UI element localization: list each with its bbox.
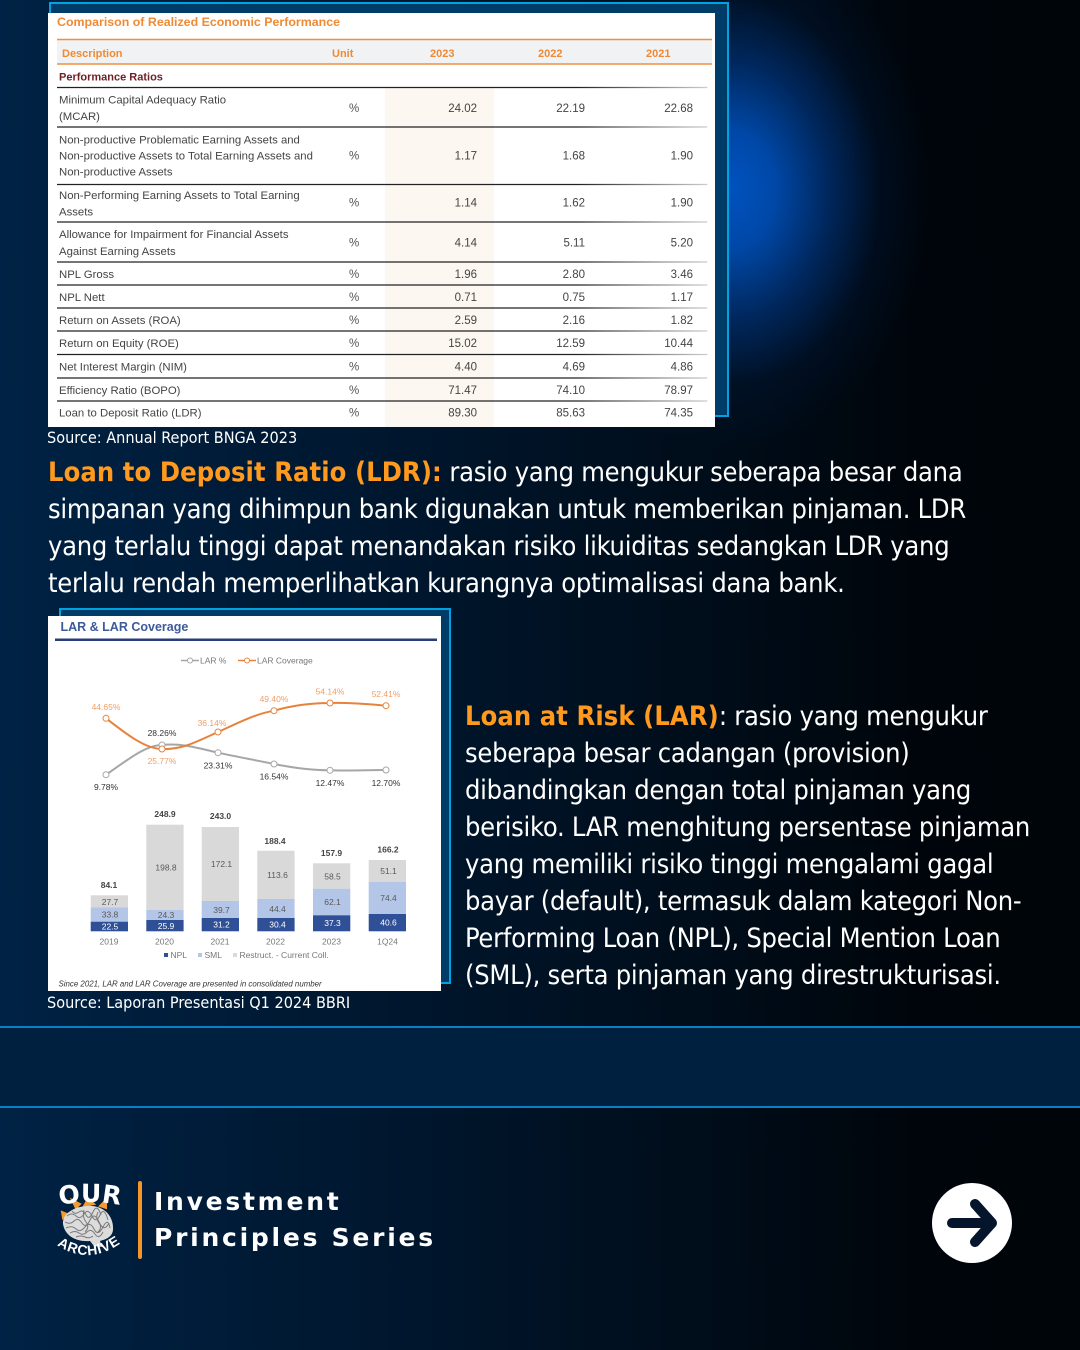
stacked bar chart: 27.7 [102, 897, 119, 907]
line chart [92, 686, 401, 792]
line chart: 44.65% [92, 702, 121, 712]
chart legend: LAR Coverage [257, 656, 313, 666]
stacked bar chart: 40.6 [380, 918, 397, 928]
table: comparison of realized economic performance: 1.17 [455, 150, 477, 162]
vertical divider [138, 1181, 142, 1259]
text block: LDR definition: simpanan yang dihimpun bank digunakan untuk memberikan pinjaman. LDR [48, 494, 966, 525]
table: comparison of realized economic performance: Efficiency Ratio (BOPO) [59, 385, 181, 397]
table: comparison of realized economic performance: Against Earning Assets [59, 246, 176, 258]
stacked bar chart: 188.4 [264, 836, 286, 846]
table: comparison of realized economic performance: NPL Gross [59, 269, 114, 281]
bar legend [164, 950, 329, 960]
text block: LAR definition: Loan at Risk (LAR): rasio yang mengukur [465, 701, 988, 732]
text block: LDR definition: yang terlalu tinggi dapat menandakan risiko likuiditas sedangkan LDR yang [48, 531, 949, 562]
bar legend: NPL [170, 950, 187, 960]
icon: next arrow [932, 1183, 1012, 1263]
chart panel: LAR and LAR coverage: LAR & LAR Coverage [60, 620, 188, 634]
stacked bar chart: 30.4 [269, 920, 286, 930]
table: comparison of realized economic performance: % [349, 150, 359, 162]
stacked bar chart: 58.5 [324, 872, 341, 882]
text block: LAR definition: (SML), serta pinjaman yang direstrukturisasi. [465, 960, 1001, 991]
source: annual report: Source: Annual Report BNGA 2023 [47, 428, 297, 447]
stacked bar chart: 62.1 [324, 897, 341, 907]
line chart: 9.78% [94, 782, 118, 792]
series title: Investment [154, 1187, 341, 1216]
table: comparison of realized economic performance: Return on Equity (ROE) [59, 338, 179, 350]
table: comparison of realized economic performance: 2022 [538, 48, 562, 60]
line chart: 54.14% [316, 686, 345, 696]
line chart: 25.77% [148, 756, 177, 766]
stacked bar chart: 44.4 [269, 904, 286, 914]
table: comparison of realized economic performance: (MCAR) [59, 111, 100, 123]
stacked bar chart: 84.1 [101, 880, 118, 890]
line chart: 16.54% [260, 772, 289, 782]
stacked bar chart: 39.7 [213, 905, 230, 915]
chart panel: LAR and LAR coverage [48, 616, 441, 991]
table: comparison of realized economic performance: NPL Nett [59, 292, 105, 304]
table: comparison of realized economic performance: % [349, 315, 359, 327]
table: comparison of realized economic performance: 4.14 [455, 238, 478, 250]
table: comparison of realized economic performance: 22.19 [556, 103, 585, 115]
text block: LAR definition: dibandingkan dengan total pinjaman yang [465, 775, 971, 806]
table: comparison of realized economic performance: 1.68 [563, 150, 585, 162]
series title: Principles Series [154, 1223, 436, 1252]
line chart: 36.14% [198, 718, 227, 728]
table: comparison of realized economic performance: Net Interest Margin (NIM) [59, 362, 187, 374]
table: comparison of realized economic performance: % [349, 292, 359, 304]
table: comparison of realized economic performance: Non-productive Problematic Earning Assets and [59, 134, 300, 146]
stacked bar chart: 157.9 [321, 848, 342, 858]
text block: LDR definition: terlalu rendah memperlihatkan kurangnya optimalisasi dana bank. [48, 568, 845, 599]
table: comparison of realized economic performance: 1.90 [671, 198, 693, 210]
line chart: 49.40% [260, 694, 289, 704]
line chart: 12.47% [316, 778, 345, 788]
table: comparison of realized economic performance: Performance Ratios [59, 72, 163, 84]
panel frame: performance table [49, 2, 729, 417]
table: comparison of realized economic performance: % [349, 362, 359, 374]
stacked bar chart: 51.1 [380, 866, 397, 876]
logo: Our Archive brain: OUR [60, 1184, 120, 1205]
text block: LAR definition: yang memiliki risiko tinggi mengalami gagal [465, 849, 993, 880]
table: comparison of realized economic performance: 74.10 [556, 385, 585, 397]
stacked bar chart: 22.5 [102, 922, 119, 932]
text block: LDR definition: Loan to Deposit Ratio (LDR): rasio yang mengukur seberapa besar dana [48, 457, 962, 488]
table: comparison of realized economic performance: 12.59 [556, 338, 585, 350]
table: comparison of realized economic performance: 10.44 [664, 338, 694, 350]
table: comparison of realized economic performance: 4.86 [671, 362, 693, 374]
table: comparison of realized economic performance: 15.02 [448, 338, 477, 350]
text block: LAR definition [465, 701, 1030, 991]
stacked bar chart: 31.2 [213, 920, 230, 930]
table: comparison of realized economic performance: 4.40 [455, 362, 477, 374]
table: comparison of realized economic performance: 2.59 [455, 315, 477, 327]
table: comparison of realized economic performance: % [349, 238, 359, 250]
stacked bar chart: 243.0 [210, 811, 231, 821]
stacked bar chart: 172.1 [211, 859, 232, 869]
stacked bar chart: 198.8 [155, 862, 177, 872]
table: comparison of realized economic performance: Assets [59, 206, 93, 218]
table: comparison of realized economic performance: 2023 [430, 48, 454, 60]
text block: LAR definition: Performing Loan (NPL), Special Mention Loan [465, 923, 1000, 954]
stacked bar chart: 33.8 [102, 910, 119, 920]
stacked bar chart: 2020 [155, 936, 174, 946]
table: comparison of realized economic performance: 5.20 [671, 238, 693, 250]
table: comparison of realized economic performance: Allowance for Impairment for Financial Assets [59, 229, 289, 241]
stacked bar chart: 25.9 [158, 921, 175, 931]
table: comparison of realized economic performance: Non-productive Assets to Total Earning Assets and [59, 150, 313, 162]
table: comparison of realized economic performance: 1.62 [563, 198, 585, 210]
table: comparison of realized economic performance: Unit [332, 48, 354, 60]
table: comparison of realized economic performance: Non-productive Assets [59, 166, 173, 178]
table: comparison of realized economic performance: 1.17 [671, 292, 693, 304]
table: comparison of realized economic performance: % [349, 103, 359, 115]
table: comparison of realized economic performance: % [349, 198, 359, 210]
stacked bar chart [91, 809, 406, 946]
table: comparison of realized economic performance: 4.69 [563, 362, 585, 374]
table: comparison of realized economic performance: % [349, 385, 359, 397]
chart footnote: Since 2021, LAR and LAR Coverage are presented in consolidated number [58, 980, 322, 988]
stacked bar chart: 2022 [266, 936, 285, 946]
stacked bar chart: 113.6 [267, 870, 288, 880]
table: comparison of realized economic performance: 24.02 [448, 103, 477, 115]
stacked bar chart: 2021 [211, 936, 230, 946]
table: comparison of realized economic performance: 5.11 [563, 238, 585, 250]
table: comparison of realized economic performance: 2.80 [563, 269, 585, 281]
table: comparison of realized economic performance: 0.75 [563, 292, 585, 304]
table: comparison of realized economic performance [48, 13, 715, 427]
line chart: 23.31% [204, 760, 233, 770]
table: comparison of realized economic performance: 22.68 [664, 103, 693, 115]
table: comparison of realized economic performance: 78.97 [664, 385, 693, 397]
table: comparison of realized economic performance: Non-Performing Earning Assets to Total Earning [59, 190, 300, 202]
table: comparison of realized economic performance: Comparison of Realized Economic Performance [57, 15, 340, 29]
source: BBRI presentation: Source: Laporan Presentasi Q1 2024 BBRI [47, 993, 350, 1012]
stacked bar chart: 248.9 [154, 809, 176, 819]
chart legend: LAR % [200, 656, 227, 666]
table: comparison of realized economic performance: Return on Assets (ROA) [59, 315, 181, 327]
line chart: 52.41% [372, 689, 401, 699]
text block: LAR definition: bayar (default), termasuk dalam kategori Non- [465, 886, 1021, 917]
line chart: 12.70% [372, 778, 401, 788]
text block: LAR definition: seberapa besar cadangan (provision) [465, 738, 910, 769]
logo: Our Archive brain [57, 1184, 120, 1256]
table: comparison of realized economic performance: 89.30 [448, 408, 477, 420]
table: comparison of realized economic performance: 2.16 [563, 315, 585, 327]
table: comparison of realized economic performance: 2021 [646, 48, 670, 60]
table: comparison of realized economic performance: 0.71 [455, 292, 477, 304]
bar legend: Restruct. - Current Coll. [240, 950, 329, 960]
table: comparison of realized economic performance: 1.82 [671, 315, 693, 327]
table: comparison of realized economic performance: 74.35 [664, 408, 693, 420]
table: comparison of realized economic performance: % [349, 269, 359, 281]
series title [154, 1187, 436, 1252]
stacked bar chart: 166.2 [377, 844, 399, 854]
table: comparison of realized economic performance: 1.90 [671, 150, 693, 162]
stacked bar chart: 1Q24 [377, 936, 398, 946]
bar legend: SML [204, 950, 222, 960]
stacked bar chart: 2019 [100, 936, 119, 946]
table: comparison of realized economic performance: Description [62, 48, 123, 60]
text block: LAR definition: berisiko. LAR menghitung persentase pinjaman [465, 812, 1030, 843]
table: comparison of realized economic performance: 3.46 [671, 269, 693, 281]
panel frame: LAR chart [59, 608, 451, 984]
table: comparison of realized economic performance: % [349, 408, 359, 420]
text block: LDR definition [48, 457, 966, 599]
table: comparison of realized economic performance: Loan to Deposit Ratio (LDR) [59, 408, 202, 420]
table: comparison of realized economic performance: 1.14 [455, 198, 478, 210]
table: comparison of realized economic performance: % [349, 338, 359, 350]
line chart: 28.26% [148, 728, 177, 738]
logo: Our Archive brain: ARCHIVE [57, 1236, 120, 1256]
table: comparison of realized economic performance: 71.47 [448, 385, 477, 397]
stacked bar chart: 2023 [322, 936, 341, 946]
stacked bar chart: 74.4 [380, 893, 397, 903]
table: comparison of realized economic performance: 85.63 [556, 408, 585, 420]
stacked bar chart: 37.3 [324, 918, 341, 928]
stacked bar chart: 24.3 [158, 910, 175, 920]
table: comparison of realized economic performance: 1.96 [455, 269, 477, 281]
chart legend [181, 656, 313, 666]
table: comparison of realized economic performance: Minimum Capital Adequacy Ratio [59, 94, 226, 106]
